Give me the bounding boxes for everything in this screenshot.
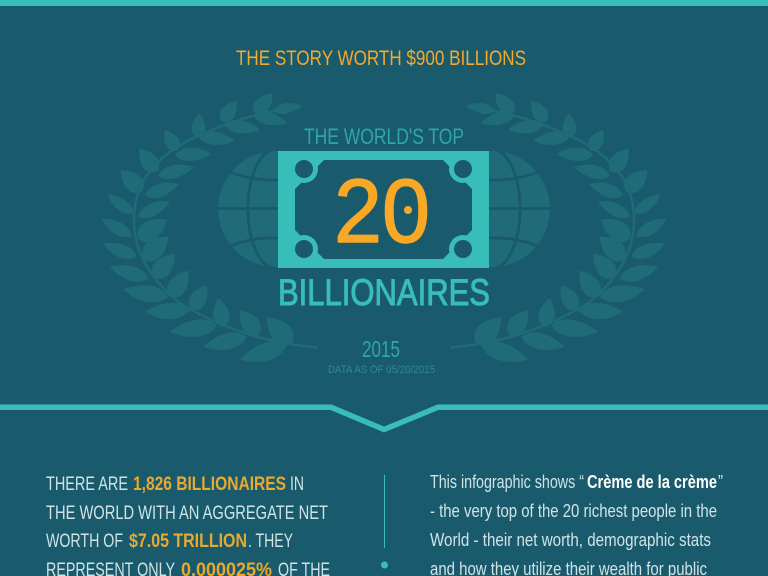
data date note: DATA AS OF 05/20/2015 — [328, 364, 435, 376]
laurel wreath: left branch — [98, 88, 317, 368]
text block: left intro: THERE ARE — [46, 474, 128, 495]
text block: left intro: IN — [290, 474, 304, 495]
text block: right intro: World - their net worth, demographic stats — [430, 530, 711, 550]
text block: left intro: $7.05 TRILLION — [129, 531, 247, 552]
heading: billionaires: BILLIONAIRES — [278, 272, 490, 313]
text block: left intro: WORTH OF — [46, 531, 123, 552]
divider with chevron — [0, 407, 768, 430]
text block: left intro: 1,826 BILLIONAIRES — [133, 474, 286, 495]
subtitle: the world's top: THE WORLD'S TOP — [304, 124, 464, 149]
icon: globe left half — [216, 149, 334, 269]
text block: left intro: THE WORLD WITH AN AGGREGATE NET — [46, 503, 328, 524]
text block: right intro: This infographic shows “ — [430, 472, 584, 492]
heading: the story worth: THE STORY WORTH $900 BILLIONS — [236, 47, 526, 70]
text block: right intro: ” — [718, 472, 723, 492]
text block: right intro: Crème de la crème — [587, 472, 717, 492]
big number 20: 20 — [334, 162, 430, 262]
center vertical divider with dot — [381, 475, 388, 568]
text block: left intro: . THEY — [248, 531, 293, 552]
text block: right intro: - the very top of the 20 richest people in the — [430, 501, 717, 521]
laurel wreath: right branch — [451, 88, 670, 368]
text block: left intro — [46, 474, 330, 576]
icon: globe right half — [434, 149, 552, 269]
icon: banknote — [278, 151, 489, 268]
year: 2015 — [362, 336, 400, 362]
text block: right intro — [430, 472, 723, 576]
top accent bar — [0, 0, 768, 6]
